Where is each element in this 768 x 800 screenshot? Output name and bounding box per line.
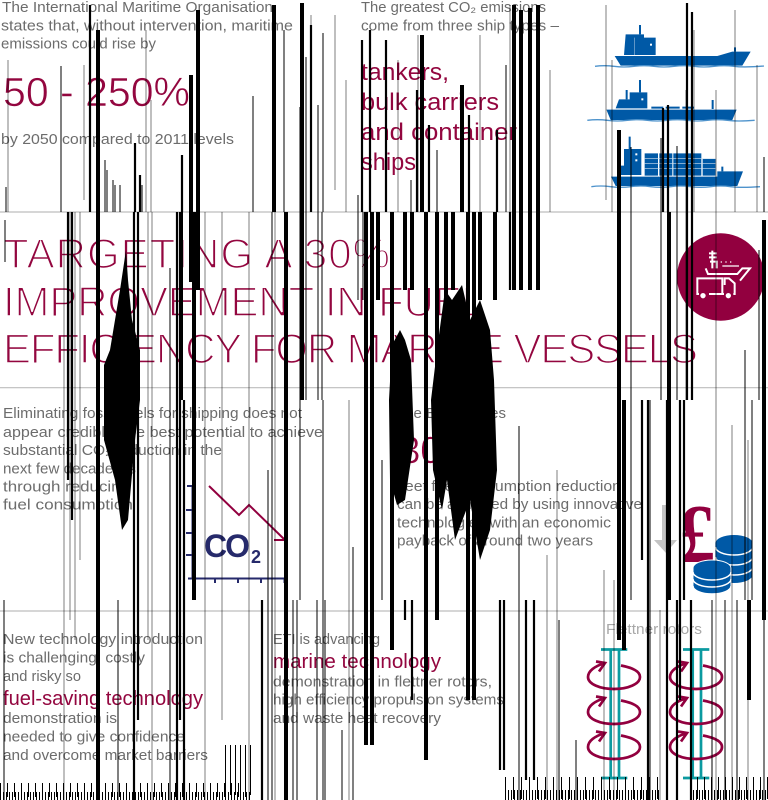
icon: pound sign: £ (680, 488, 715, 581)
highlight: marine technology: marine technology (273, 651, 441, 673)
text: IMO intro: The International Maritime Organisation (2, 0, 273, 16)
icon: left rotor (588, 650, 640, 778)
panel: reducing fuel consumption (3, 406, 323, 583)
text: by 2050: by 2050 compared to 2011 levels (1, 132, 234, 148)
title: EFFICIENCY FOR MARINE VESSELS (3, 325, 698, 372)
text: demonstrations (273, 674, 504, 727)
highlighted ship types: tankers, (361, 59, 449, 86)
icon: three ships (587, 25, 764, 187)
text: EU believes: The EU believes (396, 406, 506, 422)
text: demonstration needed: needed to give confidence (3, 730, 185, 746)
label: CO2: CO (204, 528, 250, 564)
icon: ship and truck badge (677, 233, 764, 321)
label: Flettner rotors: Flettner rotors (606, 622, 702, 638)
title (3, 230, 698, 372)
panel: IMO emissions forecast (1, 0, 293, 148)
panel: fuel-saving technology (3, 632, 208, 764)
highlight: fuel-saving technology: fuel-saving technology (3, 688, 203, 710)
text: reduction detail: technologies with an economic (397, 516, 611, 532)
highlighted ship types: bulk carriers (361, 89, 499, 116)
text: demonstration needed (3, 711, 208, 764)
title: IMPROVEMENT IN FUEL (3, 278, 485, 325)
title: TARGETING A 30% (3, 230, 390, 277)
highlighted ship types: ships (361, 149, 416, 176)
text: introduction (3, 632, 203, 685)
icon: tanker (595, 25, 764, 67)
text: demonstration needed: and overcome market barriers (3, 748, 208, 764)
text: ETI is advancing: ETI is advancing (273, 632, 380, 648)
text: reduction detail (397, 479, 642, 550)
icon: container ship (591, 137, 760, 187)
text: introduction: New technology introduction (3, 632, 203, 648)
text: reduction detail: payback of around two years (397, 534, 593, 550)
icon: cost down arrow (654, 505, 677, 553)
text: demonstrations: demonstration in flettner rotors, (273, 674, 492, 690)
text: eliminating fossil fuels: Eliminating fossil fuels for shipping does not (3, 406, 302, 422)
text: demonstration needed: demonstration is (3, 711, 117, 727)
chart: CO2 falling: 2 (251, 547, 261, 567)
text: introduction: and risky so (3, 669, 81, 685)
text: eliminating fossil fuels: next few decades is (3, 462, 136, 478)
text: introduction: is challenging, costly (3, 650, 146, 666)
panel: ETI marine technology (273, 632, 504, 727)
icon: coins (693, 535, 752, 594)
text: greatest emissions intro (361, 0, 560, 34)
statistic: 30%: 30% (400, 430, 473, 472)
panel: Flettner rotors (588, 622, 722, 778)
text: greatest emissions intro: come from three ship types – (361, 18, 560, 34)
icon: right rotor (670, 650, 722, 778)
text: IMO intro (1, 0, 293, 52)
text: demonstrations: and waste heat recovery (273, 711, 442, 727)
arrow: downward trend (209, 486, 285, 540)
text: demonstrations: high efficiency propulsion systems (273, 692, 504, 708)
statistic: 50 - 250%: 50 - 250% (3, 69, 190, 115)
text: eliminating fossil fuels: appear credible; the best potential to achieve (3, 425, 323, 441)
text: eliminating fossil fuels (3, 406, 323, 514)
text: eliminating fossil fuels: substantial CO₂ reduction in the (3, 443, 222, 459)
highlighted ship types (361, 59, 517, 176)
text: reduction detail: fleet fuel consumption reduction (397, 479, 621, 495)
text: greatest emissions intro: The greatest CO₂ emissions (361, 0, 546, 16)
text: eliminating fossil fuels: fuel consumption (3, 498, 133, 514)
panel: EU 30% saving (396, 406, 752, 594)
highlighted ship types: and container (361, 119, 517, 146)
text: eliminating fossil fuels: through reducing (3, 480, 130, 496)
text: IMO intro: states that, without intervention, maritime (1, 18, 293, 34)
text: reduction detail: can be achieved by using innovative (397, 497, 642, 513)
panel: ship types (361, 0, 764, 187)
text: IMO intro: emissions could rise by (1, 36, 157, 52)
icon: bulk carrier (587, 80, 755, 121)
chart: CO2 falling (186, 486, 285, 583)
